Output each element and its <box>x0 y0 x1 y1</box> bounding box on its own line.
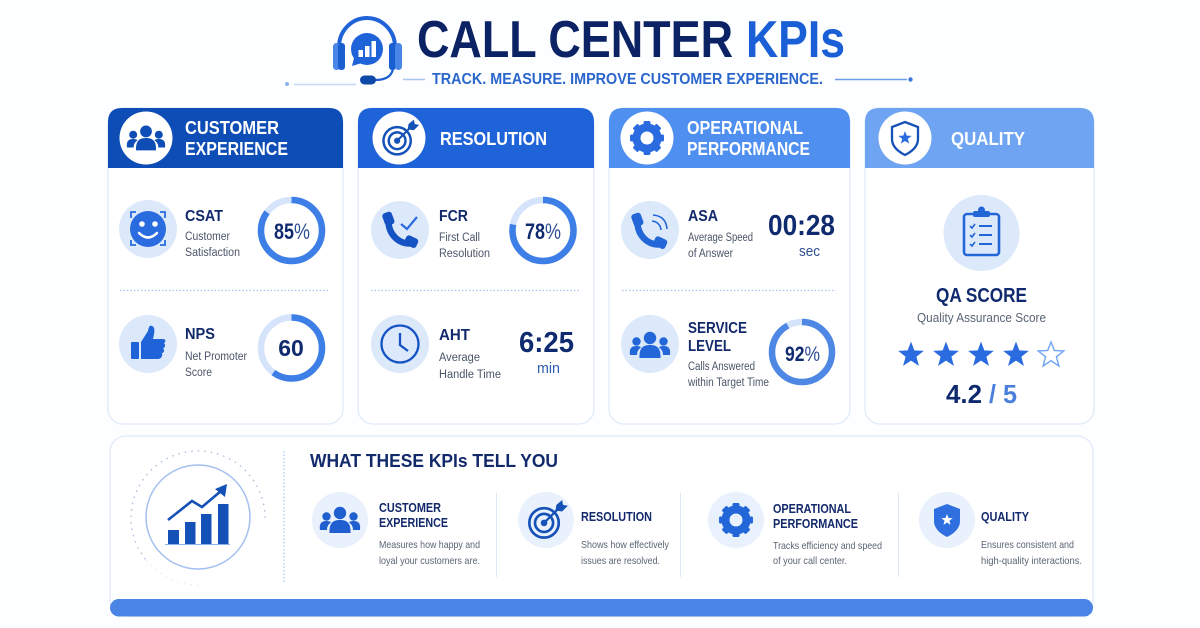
panel: operational performance <box>609 108 850 424</box>
star rating <box>898 342 1064 366</box>
ring: 60 <box>261 318 322 378</box>
item: customer experience: loyal your customers are. <box>379 555 480 567</box>
item: quality: high-quality interactions. <box>981 555 1082 567</box>
item: operational performance: OPERATIONAL <box>773 501 851 516</box>
ring: 78%: 78% <box>525 219 561 244</box>
service level label: SERVICE <box>688 320 747 337</box>
heading: RESOLUTION <box>440 129 547 149</box>
panel: what these KPIs tell you <box>110 436 1093 616</box>
item: customer experience <box>312 492 480 567</box>
score value: 4.2 <box>946 379 982 409</box>
item: resolution <box>518 492 670 567</box>
item: customer experience: Measures how happy and <box>379 539 480 551</box>
AHT label: AHT <box>439 327 470 344</box>
NPS label: Score <box>185 367 212 379</box>
QA score label: QA SCORE <box>936 285 1027 307</box>
AHT label: Handle Time <box>439 369 501 381</box>
NPS label: Net Promoter <box>185 351 247 363</box>
item: customer experience: CUSTOMER <box>379 500 442 515</box>
item: resolution: issues are resolved. <box>581 555 660 567</box>
icon: smiley <box>119 200 177 258</box>
panel header <box>865 108 1094 168</box>
value: 6:25 min: min <box>537 360 560 377</box>
item: operational performance: Tracks efficiency and speed <box>773 540 882 552</box>
item: customer experience: EXPERIENCE <box>379 515 448 530</box>
ring: 92% <box>772 322 832 382</box>
panel header <box>358 108 594 168</box>
panel: resolution <box>358 108 594 424</box>
FCR label <box>439 208 490 260</box>
service level label: LEVEL <box>688 338 731 355</box>
footer bar <box>110 599 1093 616</box>
heading: CUSTOMER <box>185 118 279 138</box>
panel header <box>609 108 850 168</box>
CSAT label: Customer <box>185 231 230 243</box>
AHT label <box>439 327 501 381</box>
ring: 60: 60 <box>278 335 304 361</box>
icon: target <box>372 112 426 164</box>
icon: ringing phone <box>621 201 679 259</box>
ring: 85%: 85% <box>274 219 310 244</box>
item: resolution: RESOLUTION <box>581 509 652 524</box>
icon: customers <box>120 112 172 164</box>
value: 00:28 sec <box>768 210 835 260</box>
QA score label: Quality Assurance Score <box>917 311 1046 325</box>
CSAT label <box>185 208 240 259</box>
heading <box>687 118 810 159</box>
subtitle: TRACK. MEASURE. IMPROVE CUSTOMER EXPERIENCE. <box>432 71 823 88</box>
FCR label: First Call <box>439 232 480 244</box>
FCR label: FCR <box>439 208 468 225</box>
ring: 85% <box>261 200 322 261</box>
heading: EXPERIENCE <box>185 139 288 159</box>
service level label: within Target Time <box>687 377 769 389</box>
icon: phone check <box>371 201 429 259</box>
heading: OPERATIONAL <box>687 118 803 138</box>
heading <box>185 118 288 159</box>
heading: WHAT THESE KPIs TELL YOU <box>310 451 558 471</box>
icon: growth chart <box>131 451 265 585</box>
icon: clock <box>371 315 429 373</box>
item: resolution: Shows how effectively <box>581 539 670 551</box>
CSAT label: CSAT <box>185 208 223 225</box>
value: 6:25 min: 6:25 <box>519 327 574 359</box>
icon: gear <box>620 112 674 164</box>
title: CALL CENTER <box>417 11 733 69</box>
icon: thumbs up <box>119 315 177 373</box>
ASA label: ASA <box>688 208 718 225</box>
item: quality: QUALITY <box>981 509 1029 524</box>
FCR label: Resolution <box>439 248 490 260</box>
value: 00:28 sec: sec <box>799 243 820 260</box>
icon: agents <box>621 315 679 373</box>
icon: headset with chart bubble <box>333 18 402 84</box>
item: operational performance: PERFORMANCE <box>773 516 858 531</box>
AHT label: Average <box>439 352 480 364</box>
CSAT label: Satisfaction <box>185 247 240 259</box>
panel header <box>108 108 343 168</box>
item: quality <box>919 492 1082 567</box>
header <box>285 11 913 88</box>
ring: 78% <box>512 200 574 261</box>
panel: quality <box>865 108 1094 424</box>
item: operational performance: of your call center. <box>773 555 847 567</box>
ASA label <box>688 208 753 260</box>
ASA label: Average Speed <box>688 232 753 244</box>
ASA label: of Answer <box>688 248 733 260</box>
heading: PERFORMANCE <box>687 139 810 159</box>
value: 00:28 sec: 00:28 <box>768 210 835 242</box>
title: KPIs <box>746 11 845 69</box>
value: 6:25 min <box>519 327 574 377</box>
icon: shield <box>878 112 932 164</box>
heading: QUALITY <box>951 129 1025 149</box>
score value: / 5 <box>989 379 1017 409</box>
NPS label: NPS <box>185 326 215 343</box>
ring: 92%: 92% <box>785 343 820 366</box>
icon: clipboard <box>944 195 1020 271</box>
item: operational performance <box>708 492 882 567</box>
panel: customer experience <box>108 108 343 424</box>
item: quality: Ensures consistent and <box>981 539 1074 551</box>
score value <box>946 379 1017 409</box>
service level label <box>687 320 769 389</box>
QA score label <box>917 285 1046 325</box>
service level label: Calls Answered <box>688 361 755 373</box>
NPS label <box>185 326 247 379</box>
